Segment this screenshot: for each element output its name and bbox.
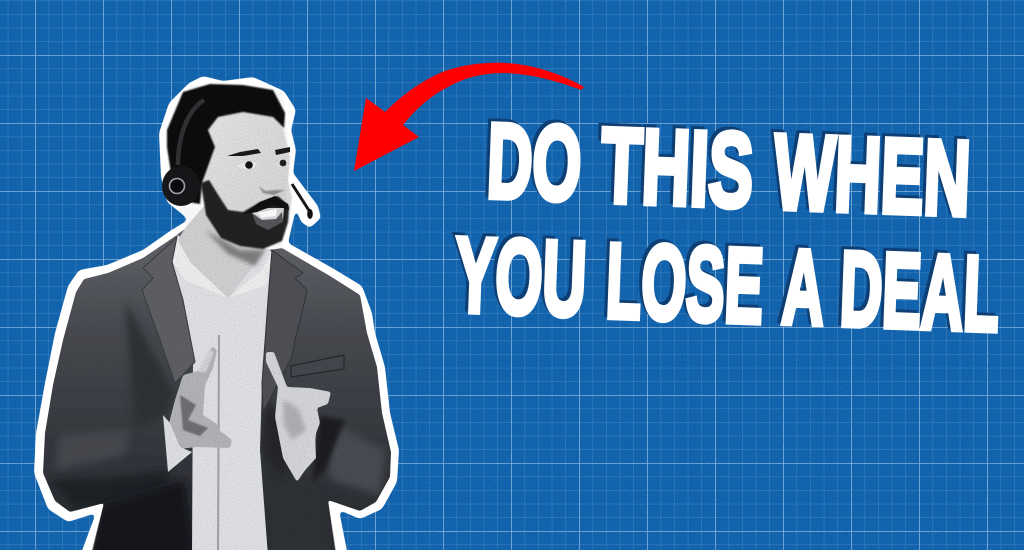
eyes xyxy=(237,161,257,169)
line 2: LOSE xyxy=(604,222,765,346)
hair xyxy=(167,84,285,204)
red curved arrow xyxy=(354,63,584,171)
headline: do this when you lose a deal xyxy=(453,102,1001,354)
neck xyxy=(178,205,266,298)
right lapel xyxy=(262,250,307,412)
line 1 xyxy=(485,102,972,238)
headset band xyxy=(178,100,204,165)
photo: man with headset xyxy=(34,76,399,550)
right shirt cuff xyxy=(297,433,316,480)
nose shadow xyxy=(259,186,285,195)
left shirt cuff xyxy=(163,415,192,472)
right hand xyxy=(266,352,331,482)
beard xyxy=(201,180,289,249)
headset microphone xyxy=(292,184,313,219)
line 1: THIS xyxy=(599,107,755,230)
white cut-out outline xyxy=(34,76,399,550)
moustache xyxy=(243,196,289,214)
eyebrows xyxy=(227,147,290,156)
left lapel xyxy=(142,237,195,383)
jacket xyxy=(43,228,391,550)
shirt xyxy=(172,235,272,550)
jacket shading: sleeves and lower body xyxy=(50,300,385,550)
shirt collar xyxy=(173,235,272,298)
line 2: A xyxy=(780,228,826,348)
headset ear cup xyxy=(162,166,200,206)
mouth xyxy=(252,208,284,228)
line 2: YOU xyxy=(453,216,588,339)
chest pocket xyxy=(291,355,344,377)
photo grain xyxy=(36,80,396,550)
face xyxy=(200,112,292,248)
line 1: DO xyxy=(485,102,583,223)
line 2 xyxy=(453,216,1001,354)
left hand xyxy=(169,346,232,449)
